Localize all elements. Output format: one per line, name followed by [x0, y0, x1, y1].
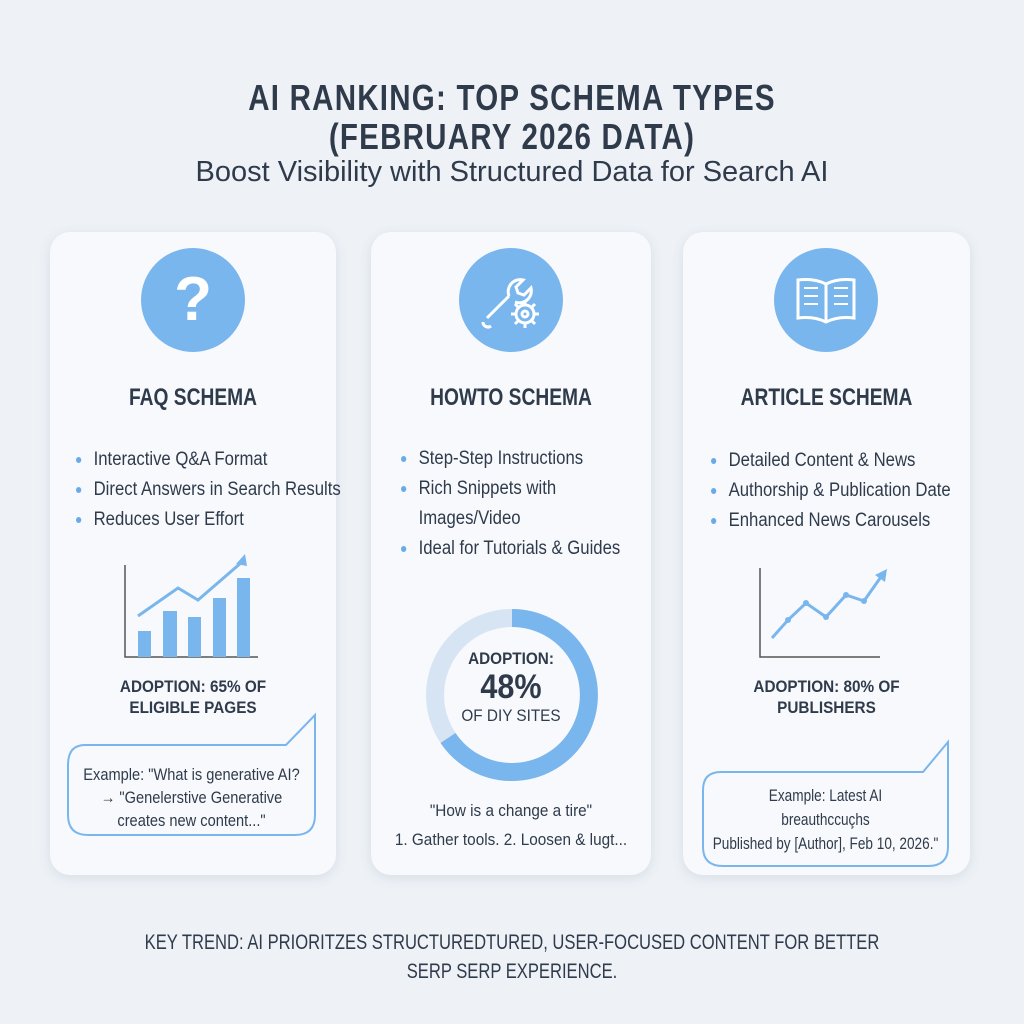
- bullets: [711, 450, 951, 531]
- panel: HowTo schema: [371, 232, 651, 875]
- adoption stat: [120, 677, 266, 717]
- bar chart: [124, 554, 258, 658]
- line chart: [759, 568, 887, 658]
- footer: key trend: SERP SERP EXPERIENCE.: [407, 960, 617, 983]
- callout: example: Example: "What is generative AI?: [83, 765, 300, 784]
- callout: example: Example: Latest AI: [769, 786, 882, 805]
- donut label: OF DIY SITES: [461, 706, 561, 725]
- icon: open book: [774, 248, 878, 352]
- adoption stat: ELIGIBLE PAGES: [129, 698, 257, 717]
- callout: example: [702, 739, 949, 867]
- adoption stat: ADOPTION: 65% OF: [120, 677, 266, 696]
- heading: HowTo: HOWTO SCHEMA: [430, 384, 592, 411]
- panel: FAQ schema: [50, 232, 336, 875]
- title: (FEBRUARY 2026 DATA): [329, 116, 695, 157]
- bullets: [401, 448, 620, 559]
- heading: Article: ARTICLE SCHEMA: [741, 384, 912, 411]
- heading: FAQ: FAQ SCHEMA: [129, 384, 257, 411]
- adoption stat: PUBLISHERS: [777, 698, 876, 717]
- example text: 1. Gather tools. 2. Loosen & lugt...: [395, 830, 627, 849]
- example text: [395, 801, 627, 849]
- donut label: ADOPTION:: [468, 649, 554, 668]
- icon: question mark: [141, 248, 245, 352]
- footer: key trend: KEY TREND: AI PRIORITZES STRUCTUREDTURED, USER-FOCUSED CONTENT FOR BETTER: [145, 931, 879, 954]
- bullets: Step-Step Instructions: [419, 448, 583, 469]
- bullets: Reduces User Effort: [94, 509, 244, 530]
- bullets: Interactive Q&A Format: [94, 449, 267, 470]
- donut chart: [426, 609, 598, 781]
- title: AI RANKING: TOP SCHEMA TYPES: [248, 77, 776, 118]
- callout: example: → "Genelerstive Generative: [101, 788, 282, 807]
- bullets: Direct Answers in Search Results: [94, 479, 341, 500]
- bullets: Detailed Content & News: [729, 450, 915, 471]
- example text: "How is a change a tire": [430, 801, 592, 820]
- bullets: Rich Snippets with: [419, 478, 556, 499]
- subtitle: Boost Visibility with Structured Data for Search AI: [196, 156, 828, 188]
- bullets: Enhanced News Carousels: [729, 510, 930, 531]
- callout: example: [67, 712, 316, 836]
- adoption stat: [753, 677, 900, 717]
- footer: key trend: [145, 931, 879, 983]
- bullets: Images/Video: [419, 508, 521, 529]
- callout: example: breauthccuçhs: [781, 810, 870, 829]
- donut label: 48%: [480, 668, 542, 706]
- donut label: [461, 649, 561, 725]
- panel: Article schema: [683, 232, 970, 875]
- callout: example: Published by [Author], Feb 10, 2026.": [713, 834, 938, 853]
- title: [248, 77, 776, 157]
- icon: wrench and gear: [459, 248, 563, 352]
- bullets: Authorship & Publication Date: [729, 480, 951, 501]
- callout: example: creates new content...": [117, 811, 266, 830]
- icon: question mark: ?: [174, 265, 212, 334]
- adoption stat: ADOPTION: 80% OF: [753, 677, 900, 696]
- bullets: Ideal for Tutorials & Guides: [419, 538, 620, 559]
- bullets: [76, 449, 341, 530]
